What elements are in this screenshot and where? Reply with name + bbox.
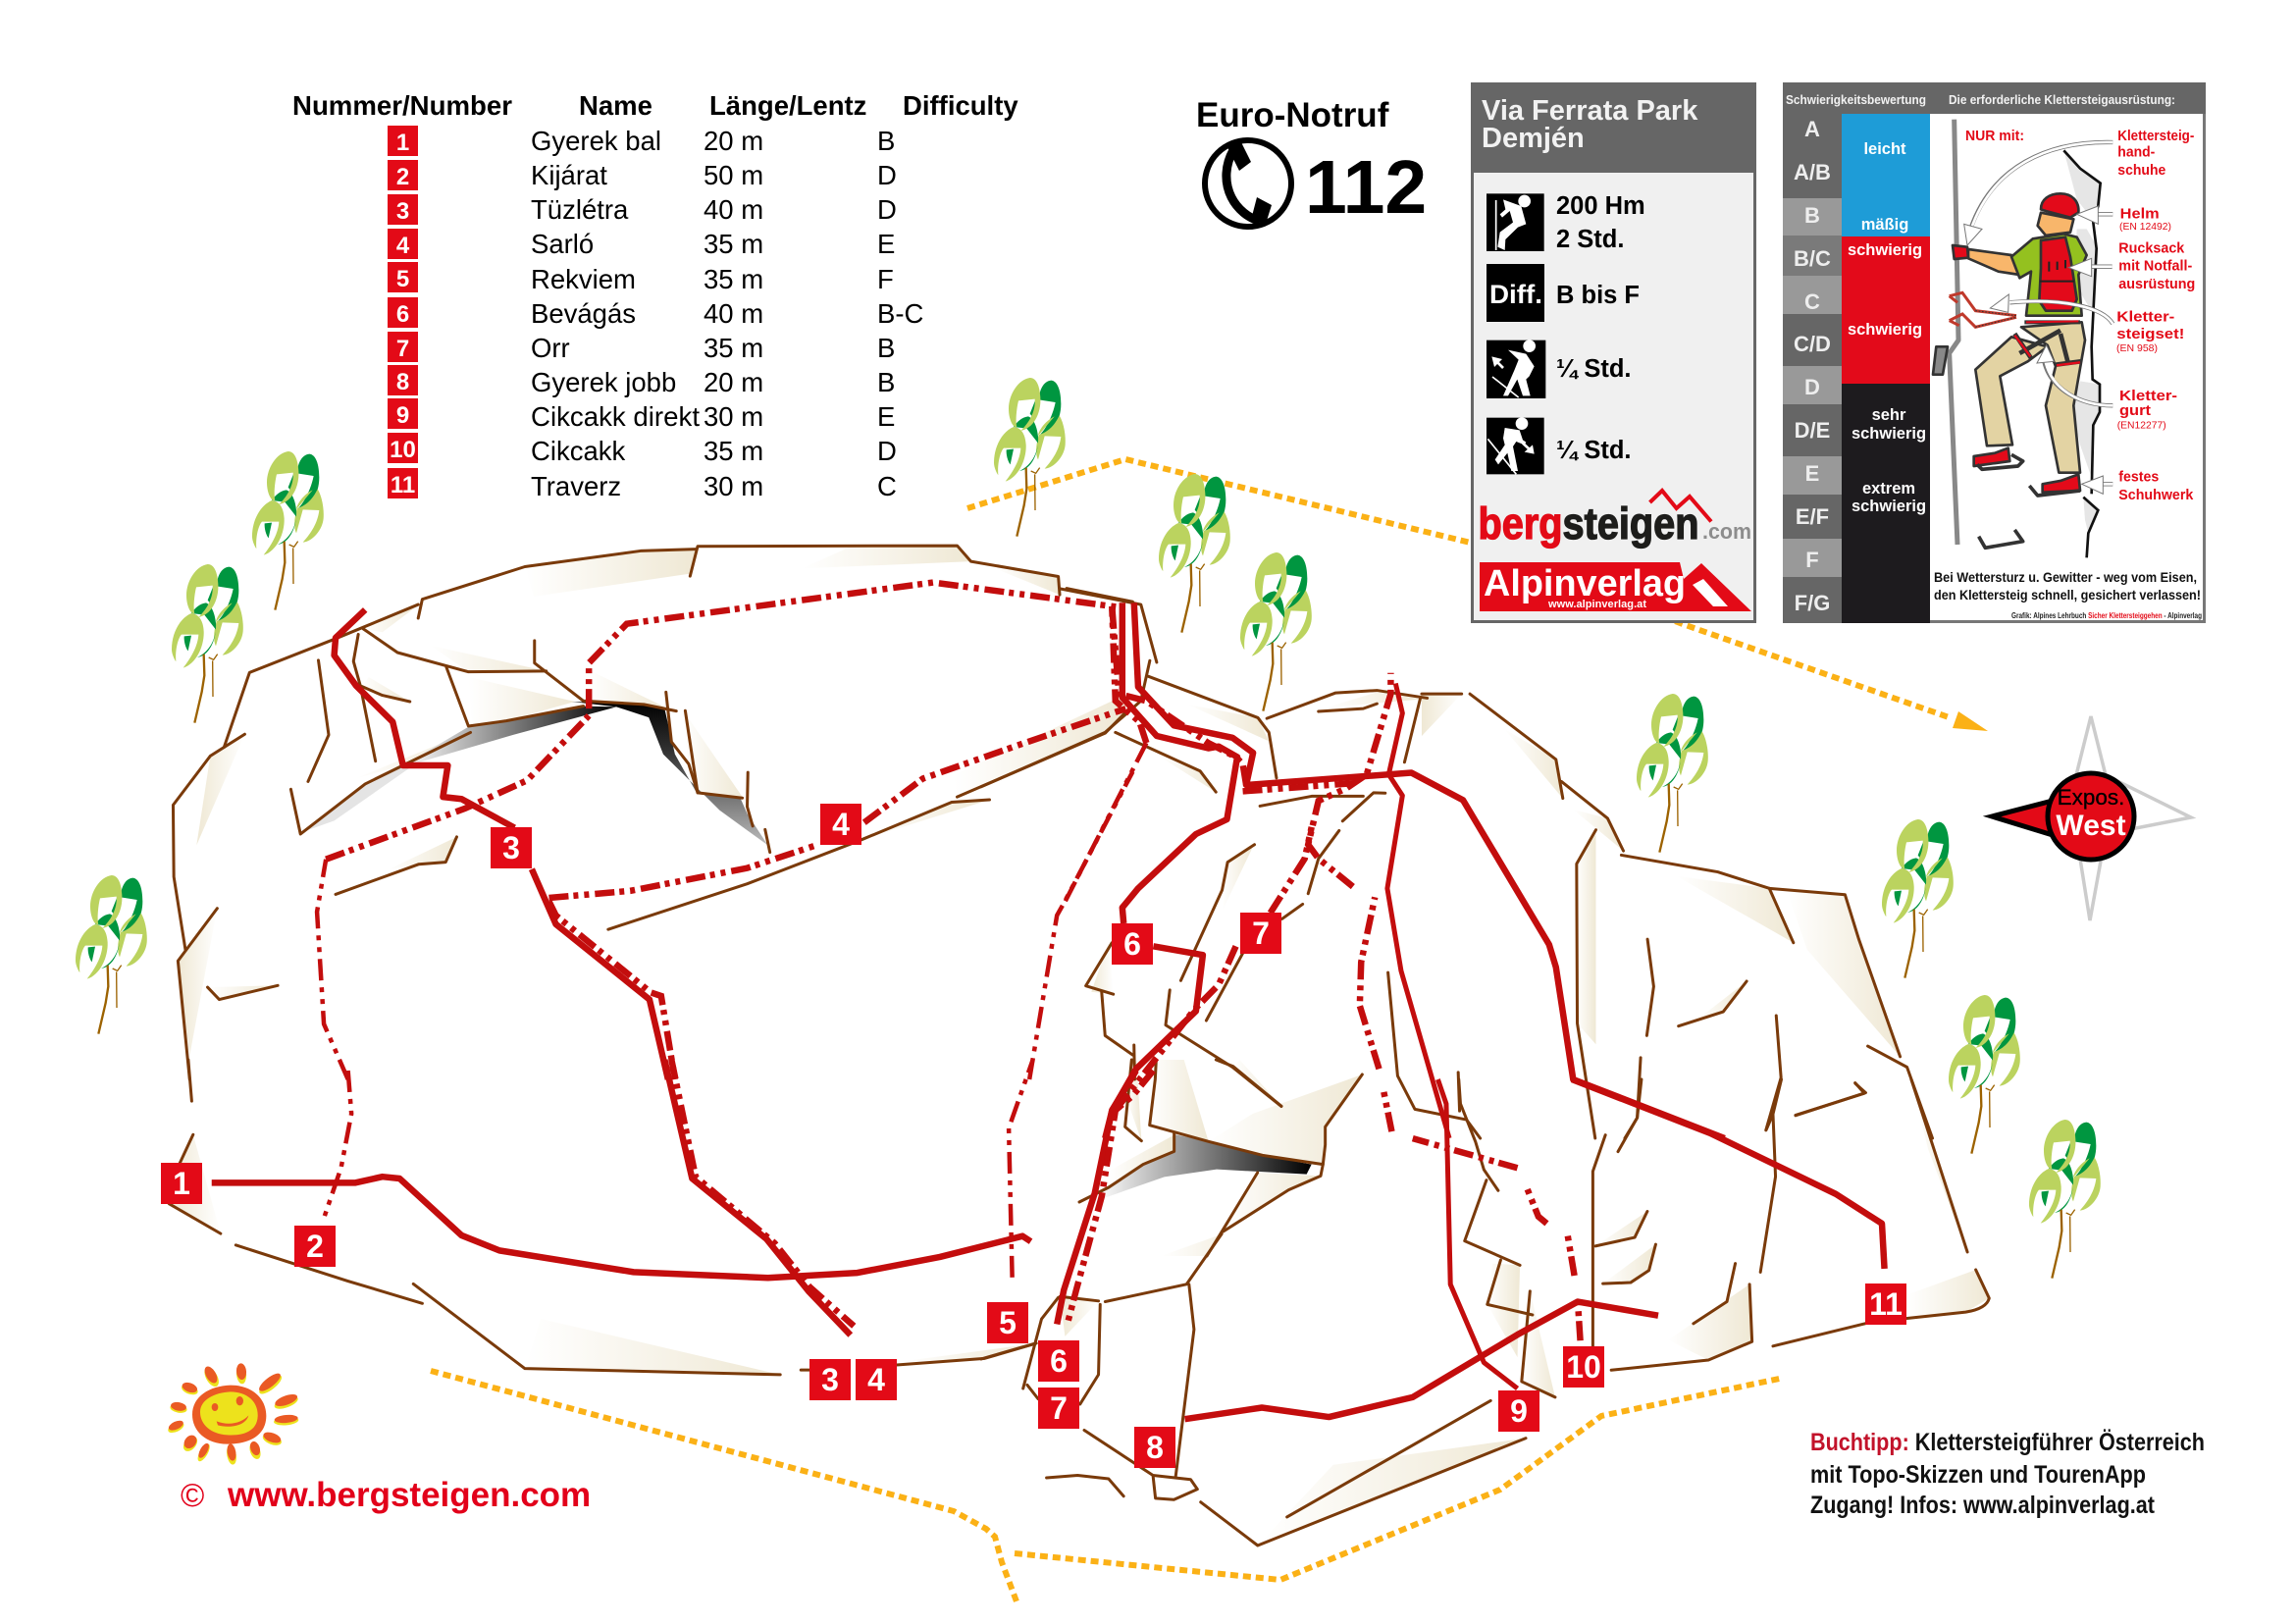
icon: difficulty: Diff. [1489,280,1542,309]
table row 4: Sarló [531,229,594,259]
table row 3: 40 m [704,194,763,225]
route 3 Tuzletra [335,609,851,1336]
table row 4: 4 [396,233,410,259]
orange access path bottom [431,1371,1784,1601]
equipment labels: Schuhwerk [2118,487,2194,503]
map marker 6 upper: 6 [1123,926,1141,962]
table row 10: D [877,436,897,466]
difficulty colour column: extrem [1862,480,1915,498]
equipment labels: ausrüstung [2118,276,2195,292]
table row 2: Kijárat [531,160,607,190]
table row 8: B [877,367,895,397]
map marker 7 upper: 7 [1252,916,1270,951]
number 112: 112 [1305,145,1427,230]
stats: height and time: 2 Std. [1556,226,1624,253]
icon: smiling sun [167,1363,299,1465]
book tip: mit Topo-Skizzen und TourenApp [1810,1461,2146,1489]
grade column [1783,114,1842,623]
equipment labels: Kletter- [2116,309,2174,326]
table row 3: Tüzlétra [531,194,629,225]
stats: height and time: 200 Hm [1556,192,1645,220]
route 4 Sarlo [548,708,1125,1326]
map marker 7 lower: 7 [1050,1390,1068,1426]
table row 1 [388,126,895,156]
route table [292,90,1018,501]
scale header: Schwierigkeitsbewertung [1786,92,1926,107]
table row 8: 20 m [704,367,763,397]
grade column: E/F [1796,504,1829,529]
table row 8 [388,365,895,397]
route 10 Cikcakk [1308,673,1581,1340]
map marker 11 [1865,1283,1906,1325]
compass: exposition west [1992,716,2191,920]
table row 9: 9 [396,402,409,429]
icon: descent [1487,417,1544,474]
table row 9 [388,398,895,432]
map marker 5: 5 [999,1305,1017,1340]
route 11 Traverz [1134,602,1885,1269]
table row 10: Cikcakk [531,436,626,466]
map marker 3 lower: 3 [821,1362,839,1397]
table row 2 [388,160,897,190]
panel: difficulty scale and equipment [1783,82,2206,623]
table row 1: B [877,126,895,156]
table row 6: 6 [396,301,409,328]
logo: bergsteigen.com: .com [1702,519,1751,544]
safety note [1934,569,2201,602]
website credit: © [181,1477,204,1513]
difficulty colour column: schwierig [1848,241,1922,259]
difficulty colour column: schwierig [1852,425,1926,443]
table row 7: 7 [396,336,409,362]
illustration: climber on via ferrata [1933,120,2112,557]
map marker 4 upper: 4 [832,807,850,842]
map marker 1 [161,1163,202,1204]
table row 10: 35 m [704,436,763,466]
equipment labels: Kletter- [2119,388,2177,404]
equipment labels: (EN 12492) [2119,221,2171,233]
map marker 2 [294,1226,336,1267]
panel title: Via Ferrata Park [1482,95,1698,127]
compass: exposition west: West [2056,810,2126,842]
table row 3: D [877,194,897,225]
grade column: B [1804,203,1820,228]
map marker 8 [1134,1427,1175,1468]
book tip [1810,1428,2205,1519]
table row 6: B-C [877,298,923,329]
table row 6: Bevágás [531,298,636,329]
grade column: B/C [1794,246,1831,271]
equipment labels: mit Notfall- [2118,258,2192,275]
grade column: F/G [1795,591,1830,615]
equipment labels: gurt [2119,402,2151,419]
table row 9: 30 m [704,401,763,432]
grade column: C [1804,289,1820,314]
difficulty colour column: schwierig [1848,321,1922,339]
stats: difficulty: B bis F [1556,282,1640,309]
difficulty colour column: mäßig [1861,216,1908,234]
equipment labels: steigset! [2116,326,2184,342]
equipment labels: Rucksack [2118,240,2185,257]
logo: Alpinverlag: www.alpinverlag.at [1547,599,1646,610]
difficulty colour column: schwierig [1852,498,1926,515]
map marker 3 upper: 3 [502,830,520,865]
website credit: www.bergsteigen.com [227,1476,591,1514]
map marker 9 [1498,1390,1539,1432]
grade column: E [1805,461,1819,486]
route 2 Kijarat [317,583,1122,1218]
compass: exposition west: Expos. [2058,785,2124,810]
rock face shading [169,547,1989,1545]
grade column: D/E [1795,418,1830,443]
table row 5: Rekviem [531,264,636,294]
map marker 6 upper [1112,923,1153,965]
table row 9: E [877,401,895,432]
grade column: A [1804,117,1820,141]
equipment labels: hand- [2117,143,2155,161]
map marker 4 lower: 4 [867,1362,885,1397]
table row 10 [388,433,897,466]
table row 11: C [877,471,897,501]
book tip: Buchtipp: Klettersteigführer Österreich [1810,1428,2205,1456]
map marker 4 upper [820,804,861,845]
difficulty colour column: leicht [1863,140,1906,158]
icon: telephone [1205,140,1291,227]
heading: Euro-Notruf: Euro-Notruf [1196,96,1389,134]
cave shadows [300,702,1312,1200]
table row 1: 20 m [704,126,763,156]
table row 5: 5 [396,266,409,292]
trees [76,378,2101,1279]
table header: Name [579,90,652,121]
stats: descent time: ¼ Std. [1556,437,1632,464]
table row 5: 35 m [704,264,763,294]
map marker 9: 9 [1510,1393,1528,1429]
route 8 Gyerek jobb [1185,1302,1658,1419]
map marker 8: 8 [1146,1430,1164,1465]
logo: bergsteigen.com: bergsteigen [1478,498,1699,549]
rock outlines [169,546,1989,1545]
graphic credit: Grafik: Alpines Lehrbuch Sicher Klettersteiggehen - Alpinverlag [2011,611,2202,620]
table header: Länge/Lentz [709,90,866,121]
table row 11: Traverz [531,471,621,501]
equipment labels: NUR mit: [1965,128,2024,144]
table row 4: 35 m [704,229,763,259]
table row 1: Gyerek bal [531,126,661,156]
map marker 11: 11 [1869,1286,1903,1322]
map marker 3 upper [491,827,532,868]
table row 7: Orr [531,333,570,363]
table row 7: B [877,333,895,363]
table row 5 [388,262,894,294]
table row 10: 10 [390,437,416,463]
route 7 Orr [1112,606,1353,1115]
stats: approach time: ¼ Std. [1556,355,1632,383]
equipment labels: festes [2118,469,2159,486]
table header: Difficulty [903,90,1018,121]
route 1 Gyerek bal [212,1177,1031,1278]
table row 3: 3 [396,198,409,225]
table row 6 [388,297,923,329]
map marker 7 lower [1038,1388,1079,1429]
icon: climber ascent [1487,193,1544,251]
table row 7: 35 m [704,333,763,363]
map marker 6 lower [1038,1340,1079,1382]
emergency number [1196,96,1427,230]
table row 11: 30 m [704,471,763,501]
grade column: A/B [1794,160,1831,184]
table row 3 [388,194,897,225]
route 6 Bevagas [1057,602,1237,1325]
table row 8: 8 [396,369,409,395]
map marker 3 lower [809,1359,851,1400]
equipment labels [1965,128,2195,503]
equipment labels: (EN12277) [2117,420,2166,432]
icon: difficulty [1487,264,1544,322]
table row 4 [388,229,895,259]
safety note: Bei Wettersturz u. Gewitter - weg vom Eisen, [1934,569,2197,585]
difficulty colour column: sehr [1872,406,1906,424]
logo: Alpinverlag [1480,562,1751,611]
stats: height and time [1556,192,1645,253]
table row 11 [388,468,897,501]
table row 1: 1 [396,130,409,156]
table row 6: 40 m [704,298,763,329]
map marker 4 lower [856,1359,897,1400]
map marker 6 lower: 6 [1050,1343,1068,1379]
grade column: C/D [1794,332,1831,356]
table row 2: D [877,160,897,190]
map marker 2: 2 [306,1229,324,1264]
panel title [1482,95,1698,154]
equipment labels: (EN 958) [2116,342,2158,354]
map marker 1: 1 [173,1166,190,1201]
table row 11: 11 [391,472,415,498]
table row 9: Cikcakk direkt [531,401,700,432]
equipment labels: Klettersteig- [2117,128,2194,144]
logo: Alpinverlag: Alpinverlag [1484,563,1686,604]
table row 2: 50 m [704,160,763,190]
grade column: F [1805,548,1819,572]
table row 7 [388,332,895,363]
safety note: den Klettersteig schnell, gesichert verlassen! [1934,587,2201,602]
book tip: Zugang! Infos: www.alpinverlag.at [1810,1492,2156,1519]
table row 2: 2 [396,164,409,190]
map marker 10: 10 [1566,1349,1601,1385]
difficulty colour column [1842,114,1930,623]
table row 8: Gyerek jobb [531,367,676,397]
equipment labels: Helm [2120,206,2160,223]
panel: Via Ferrata Park info [1471,82,1756,622]
route 9 Cikcakk direkt [1387,683,1518,1388]
map marker 5 [987,1302,1028,1343]
grade column: D [1804,375,1820,399]
equipment labels: schuhe [2117,162,2165,179]
orange access path top with arrow [967,459,1988,731]
table header: Nummer/Number [292,90,512,121]
panel title: Demjén [1482,123,1585,154]
route 5 Rekviem [1009,606,1146,1278]
table header [292,90,1018,121]
map marker 7 upper [1240,913,1281,954]
table row 5: F [877,264,894,294]
equipment header: Die erforderliche Klettersteigausrüstung: [1949,92,2175,107]
icon: approach [1487,340,1545,398]
table row 4: E [877,229,895,259]
